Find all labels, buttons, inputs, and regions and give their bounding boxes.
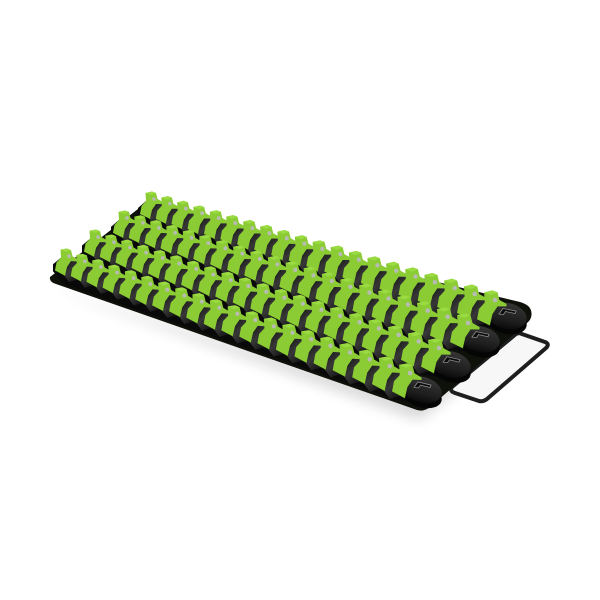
soft shadow — [50, 288, 535, 420]
rail: row 2 — [111, 210, 502, 361]
base plate — [50, 209, 532, 411]
icon: wire carry handle — [451, 333, 548, 401]
rail: row 4 (front) — [53, 248, 444, 413]
rail: row 1 (back) — [138, 192, 529, 338]
rail: row 3 — [82, 229, 473, 387]
